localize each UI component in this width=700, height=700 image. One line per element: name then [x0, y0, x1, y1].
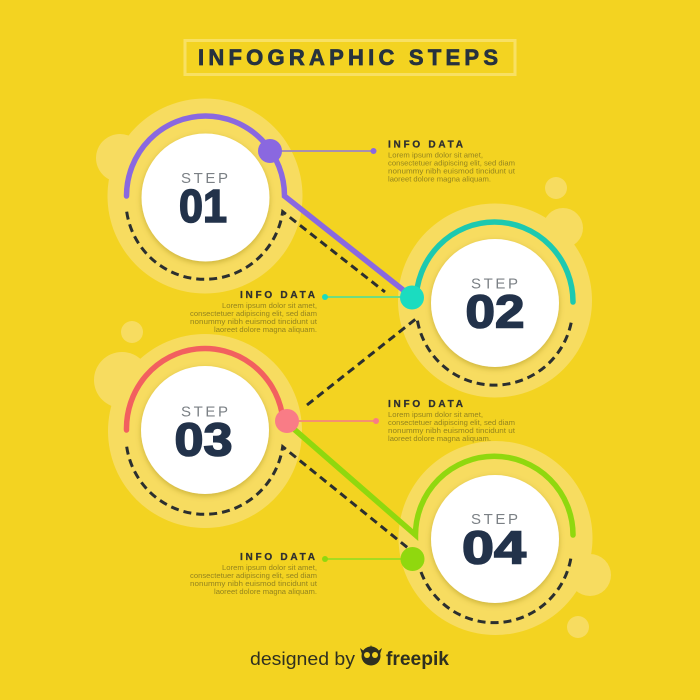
- title: [185, 40, 515, 74]
- text block: step 4 info: [190, 552, 318, 596]
- connector: step 3: [275, 409, 379, 433]
- text block: step 4 info: INFO DATA: [240, 552, 315, 563]
- connector: step 1: [258, 139, 376, 163]
- arc: step 4: [287, 423, 573, 535]
- arc: step 3: [126, 348, 287, 430]
- text block: step 1 info: Lorem ipsum dolor sit amet,: [388, 151, 483, 160]
- dashed path: step 2: [307, 318, 572, 405]
- panel: step 2: [307, 222, 573, 405]
- text block: step 3 info: nonummy nibh euismod tincidunt ut: [388, 426, 516, 435]
- text block: step 4 info: Lorem ipsum dolor sit amet,: [222, 563, 317, 572]
- text block: step 3 info: Lorem ipsum dolor sit amet,: [388, 410, 483, 419]
- white disc: step 1: [142, 134, 270, 262]
- dashed path: step 1: [127, 212, 385, 292]
- text block: step 4 info: nonummy nibh euismod tincidunt ut: [190, 579, 318, 588]
- step label 1: STEP: [181, 170, 228, 187]
- step number 3: 03: [174, 414, 232, 466]
- footer credit: designed by: [250, 649, 355, 669]
- text block: step 2 info: Lorem ipsum dolor sit amet,: [222, 301, 317, 310]
- panel: step 4: [287, 423, 573, 623]
- arc: step 1: [126, 116, 412, 297]
- panel: step 1: [126, 116, 412, 297]
- white disc: step 3: [141, 366, 269, 494]
- dashed path: step 4: [421, 554, 572, 623]
- step label 4: STEP: [471, 511, 518, 528]
- text block: step 3 info: [388, 399, 516, 443]
- text block: step 1 info: laoreet dolore magna aliquam.: [388, 174, 491, 183]
- halo: step 2: [398, 177, 592, 398]
- text block: step 2 info: consectetuer adipiscing elit, sed diam: [190, 309, 317, 318]
- text block: step 2 info: INFO DATA: [240, 290, 315, 301]
- text block: step 1 info: [388, 140, 516, 183]
- arc: step 2: [416, 222, 573, 302]
- step number 4: 04: [462, 522, 527, 574]
- step label 2: STEP: [471, 276, 518, 292]
- text block: step 3 info: laoreet dolore magna aliquam.: [388, 434, 491, 443]
- connector: step 2: [322, 286, 424, 310]
- white disc: step 2: [431, 239, 559, 367]
- dashed path: step 3: [127, 447, 408, 548]
- text block: step 2 info: laoreet dolore magna aliquam.: [214, 325, 317, 334]
- step number 1: 01: [179, 180, 227, 232]
- halo: step 4: [398, 441, 611, 638]
- panel: step 3: [126, 348, 408, 548]
- title: INFOGRAPHIC STEPS: [198, 45, 498, 70]
- footer credit: [250, 645, 449, 670]
- text block: step 3 info: consectetuer adipiscing elit, sed diam: [388, 418, 515, 427]
- halos behind all steps: [94, 98, 611, 638]
- text block: step 4 info: consectetuer adipiscing elit, sed diam: [190, 571, 317, 580]
- footer credit: freepik: [386, 649, 449, 670]
- text block: step 1 info: INFO DATA: [388, 140, 463, 151]
- white disc: step 4: [431, 475, 559, 603]
- text block: step 2 info: nonummy nibh euismod tincidunt ut: [190, 317, 318, 326]
- text block: step 1 info: consectetuer adipiscing elit, sed diam: [388, 159, 515, 168]
- halo: step 1: [96, 98, 302, 294]
- icon: freepik mascot: [360, 645, 382, 666]
- text block: step 2 info: [190, 290, 318, 334]
- text block: step 1 info: nonummy nibh euismod tincidunt ut: [388, 166, 516, 176]
- step number 2: 02: [466, 286, 524, 338]
- step label 3: STEP: [181, 404, 228, 420]
- text block: step 4 info: laoreet dolore magna aliquam.: [214, 587, 317, 596]
- halo: step 3: [94, 321, 302, 528]
- connector: step 4: [322, 547, 424, 571]
- text block: step 3 info: INFO DATA: [388, 399, 463, 410]
